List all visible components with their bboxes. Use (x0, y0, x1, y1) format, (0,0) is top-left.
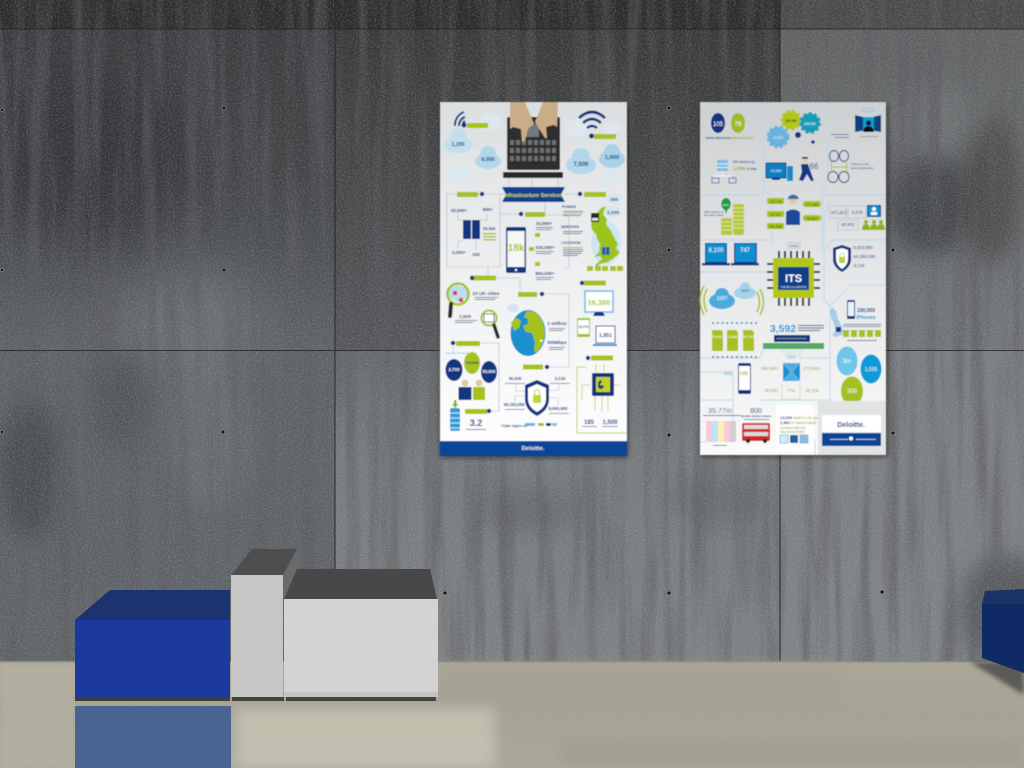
stat: 3,592 and circuit board (763, 323, 824, 357)
section label (584, 280, 606, 286)
icon: thief and desktop (766, 157, 819, 181)
section: 800 double decker buses (741, 406, 771, 443)
section: people: 50,000 (483, 369, 496, 374)
section: shield stats (833, 245, 876, 272)
section: phone and UK: 100,000 (857, 308, 875, 314)
section: envelope stats: 175,263+ (803, 366, 821, 371)
icon: right wifi (579, 112, 605, 138)
section: mobile phone (506, 212, 555, 280)
section: people: Deloitte Services (446, 351, 469, 355)
section: 10,000 staff: 2,500 in Switzerland (780, 420, 816, 425)
icon: gears: 15,000 (773, 136, 783, 140)
section: security shield: Triple signs on (501, 424, 528, 428)
section: ovals 105 and 79: CHANGE PROJECTS (725, 136, 753, 140)
section: clouds and wireless (700, 282, 764, 315)
panel: Deloitte: Deloitte. (837, 422, 865, 429)
section: SIM cards: 34,143 (743, 335, 754, 339)
section: ovals 105 and 79: 105 (713, 122, 724, 128)
section: security shield (501, 376, 570, 428)
section: globe (507, 292, 567, 370)
icons: two laptops: 747 (740, 248, 751, 254)
section: UK map: SERVERS (561, 225, 580, 229)
section: headset support: 991,848 (769, 225, 782, 229)
section: headset support: 99,853 (807, 217, 817, 221)
section: clouds and wireless: 45% (741, 289, 749, 293)
footer band: Deloitte (440, 441, 627, 456)
section: 10,000 staff: provided with the (780, 426, 806, 430)
section label (584, 192, 606, 197)
cloud: 7,500 (566, 148, 596, 174)
section: 10,000 staff: new Sony Entity (780, 430, 805, 434)
icon: gears: 200,000 (804, 122, 816, 126)
section: phone and UK (830, 300, 881, 341)
section: cities (446, 276, 500, 337)
icon: gears (768, 111, 820, 147)
icons: two laptops (702, 243, 759, 265)
section: clouds and wireless: 1007 (716, 296, 728, 302)
section: ovals 105 and 79: 79 (735, 122, 742, 128)
section: ovals 105 and 79 (706, 113, 753, 140)
panel: Deloitte (818, 401, 886, 455)
stat: coins: this asset market (704, 213, 724, 217)
section: security shield: 3,134 (555, 376, 566, 381)
section: ovals 105 and 79: DRIVE PROJECTS (706, 136, 730, 140)
banner: Infrastructure Services (502, 187, 565, 202)
section: cities: 23 UK cities (472, 291, 500, 297)
section: mobile phone: 325,000+ (535, 245, 555, 250)
section: telephony chip: 1,500 (602, 420, 618, 426)
stat: we backed up 1.2PB: We backed up (733, 160, 755, 164)
cloud: 1,000 (599, 144, 625, 168)
floor (0, 661, 1024, 768)
section: 35.77m pages (703, 406, 741, 446)
seat: tall grey block (231, 549, 297, 701)
icon: phone with green text (738, 363, 751, 394)
section: UK map (561, 192, 623, 271)
section: envelope stats: 890,000+ (761, 366, 779, 371)
section: ovals: 1,695 (865, 367, 877, 373)
section: headset support: 171,080 (806, 203, 818, 207)
stat: 3.2: 3.2 (470, 418, 482, 428)
wall tie holes (0, 106, 895, 595)
section: people (446, 341, 499, 411)
section: globe: 505Mbps (547, 340, 567, 345)
section: users stats: 42,901 (841, 222, 855, 227)
section: users stats (830, 205, 885, 230)
poster: ITS the big illumination (700, 102, 886, 455)
section: shield stats: 44,180,000 (853, 254, 876, 259)
section: envelope stats: 25,106 (806, 388, 819, 393)
section: headset support: 122,704 (769, 200, 782, 204)
section: devices: 1,851 (599, 333, 612, 339)
section: data centres: 4,000+ (452, 250, 466, 255)
icon: database stack (450, 400, 460, 431)
section: mobile phone: 18k (508, 243, 525, 254)
seat: blue cube (75, 590, 230, 701)
icon: ITS central chip (767, 251, 820, 306)
icon: monitors and user (831, 108, 881, 138)
icon: bicycle and applications (828, 150, 874, 182)
section: phone and UK: iPhones (856, 315, 876, 321)
section: data centres (451, 192, 496, 257)
section label (472, 276, 496, 280)
section: envelope stats (761, 355, 821, 399)
section: users stats: 471,812 (831, 210, 847, 215)
stat: we backed up 1.2PB: 1.2PB of data (733, 166, 757, 171)
section: UK map: 2,100 (607, 210, 619, 216)
icons: two laptops: 8,100 (708, 248, 724, 254)
cloud: 1,200: 1,200 (452, 142, 465, 148)
icon: gears: 350,000 (785, 119, 797, 123)
icon: bicycle and applications: Riding on the (851, 162, 869, 166)
label: chip heading (788, 243, 800, 248)
section: mobile phone: 850,000+ (535, 271, 555, 276)
section: data centres: 250 (472, 252, 480, 257)
section: telephony chip: 185 (584, 420, 595, 426)
section: envelope stats: 35,000 (765, 388, 778, 393)
label: chip heading: IPPPA (790, 244, 798, 248)
section: 800 double decker buses: 800 (750, 406, 762, 415)
icon: left wifi (455, 112, 466, 126)
section: devices: 16,380 (588, 298, 610, 307)
icon: thief and desktop: 66 (810, 162, 819, 171)
cloud: 1,000: 1,000 (605, 155, 619, 161)
label: left wifi (467, 123, 488, 128)
stat: coins: 60% (723, 203, 729, 207)
connector lines (447, 178, 580, 367)
icon: keyboard and hands (503, 102, 563, 178)
section: headset support: 22,761 (770, 213, 781, 217)
cloud: 1,200 (443, 128, 473, 153)
icon: thief and desktop: 14,300 (770, 169, 782, 173)
icon: phone with green text: tdk (740, 371, 749, 377)
section: UK map: LOCATION (561, 241, 581, 245)
section: users stats: 4,378 (852, 210, 863, 215)
poster: Infrastructure Services (440, 102, 627, 456)
section: SIM cards: 3,888 (728, 335, 737, 339)
banner: Infrastructure Services: Infrastructure Services (504, 193, 563, 199)
section: ovals: 3m (843, 359, 851, 365)
section: security shield: 46,183,069 (504, 402, 525, 407)
footer band: Deloitte: Deloitte. (522, 446, 545, 452)
stat: coins: NHS valuation of (704, 210, 724, 214)
section: 10,000 staff: 10,000 staff in UK and (780, 415, 820, 420)
section: SIM cards: 53.8m (712, 335, 723, 339)
label: right wifi (594, 134, 616, 139)
section: people: 2,700 (448, 367, 460, 372)
label: phone section (724, 371, 733, 375)
reflection of blue seat on floor (75, 706, 231, 768)
faded clouds (448, 113, 620, 186)
icon: bicycle and applications: latest application (851, 166, 874, 170)
section: 800 double decker buses: double decker buses (741, 414, 771, 418)
cloud: 6,000: 6,000 (482, 157, 495, 163)
icon: ITS central chip: ITS (785, 273, 802, 285)
section: ovals: 300 (847, 389, 858, 395)
stat: 3,592 and circuit board: 3,592 (770, 323, 796, 335)
section: mobile phone: 15,000+ (536, 221, 553, 226)
icon: ITS central chip: THE BIG ILLUMINATE (780, 285, 807, 289)
section: shield stats: 3,134 (854, 263, 865, 268)
section: devices: 12,772 (579, 325, 589, 329)
section: UK map: POWER (562, 205, 576, 209)
cloud: 6,000 (475, 146, 501, 169)
stat: we backed up 1.2PB (712, 160, 757, 183)
poster shadows (441, 104, 888, 458)
stat: coins (704, 198, 744, 235)
seat: blue cube at right edge (982, 589, 1024, 673)
cloud: 7,500: 7,500 (573, 162, 589, 168)
section: security shield: 8,055,000 (549, 406, 568, 411)
section: people: 710,838 (466, 361, 478, 365)
section: ovals (836, 346, 882, 406)
circuit lines (700, 102, 886, 455)
section: data centres: 16,000+ (451, 208, 468, 213)
section: shield stats: 8,503,860 (853, 245, 873, 250)
section label (518, 292, 537, 297)
section: cities: 2,500 (459, 314, 471, 320)
section label (523, 364, 543, 370)
section label (591, 356, 613, 360)
section: 10,000 staff (776, 404, 820, 451)
section: UK map: 250 (610, 197, 618, 203)
section label (525, 212, 545, 217)
seat: low grey block (284, 569, 438, 701)
section: security shield: 30,000 (509, 376, 522, 381)
section: data centres: 15.5m (482, 226, 496, 231)
section: 35.77m pages: 35.77m (708, 406, 732, 415)
section: envelope stats: 77% (787, 388, 795, 393)
section: SIM cards (712, 323, 758, 357)
stat: 3.2 (465, 409, 491, 430)
section: data centres: 600+ (483, 207, 493, 212)
section label (457, 192, 478, 197)
section label (456, 341, 480, 346)
section: globe: 2 million (547, 321, 567, 327)
section: telephony chip (577, 356, 627, 433)
section: headset support (767, 195, 821, 229)
section: devices (577, 280, 617, 346)
